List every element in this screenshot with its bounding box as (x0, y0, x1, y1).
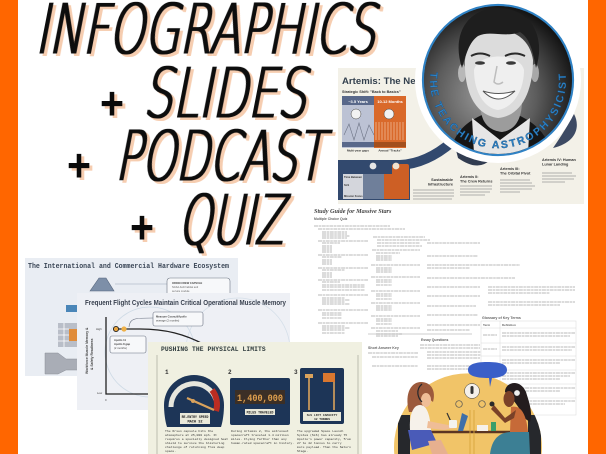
line chart: 0 (105, 398, 107, 402)
line chart (96, 317, 230, 402)
gauge (164, 375, 224, 427)
odometer: MILES TRAVELED (247, 410, 273, 414)
title line: slides: + (100, 77, 124, 129)
artemis iv mission (542, 114, 577, 182)
caption 3: The upgraded Space Launch (297, 429, 344, 433)
gauge: MACH 32 (187, 420, 203, 424)
caption 1 (165, 429, 228, 453)
callout: memory average: average (2 months) (156, 318, 179, 322)
number 2: 2 (228, 369, 232, 376)
glossary table: Term (483, 323, 490, 327)
title line: podcast (67, 118, 338, 199)
odometer: 1,400,000 (237, 394, 283, 405)
strategic shift subheading: Strategic Shift: "Back to Basics" (342, 90, 401, 94)
sustainable infrastructure: Infrastructure (428, 182, 454, 186)
short answer section: Short Answer Key (368, 346, 399, 350)
caption 1: requires a specially designed heat (165, 437, 228, 441)
glossary table (481, 316, 576, 415)
artemis iii mission (500, 167, 535, 192)
callout: crew capsule (167, 278, 230, 298)
artemis ii mission: The Crew Returns (460, 180, 492, 184)
gauge: RE-ENTRY SPEED (182, 415, 208, 419)
orbit track (400, 142, 452, 165)
laptop and table objects (458, 410, 496, 454)
title line: podcast: + (67, 139, 91, 191)
axis label line two: & Safety Readiness (90, 338, 94, 370)
comparison: years versus months (342, 96, 406, 152)
caption 1: The Orion capsule hits the (165, 429, 213, 433)
line chart: High (96, 327, 102, 331)
title line: quiz (130, 182, 298, 263)
title line: podcast: PODCAST (115, 120, 338, 199)
axis label: Workforce Muscle Memory & (85, 327, 89, 374)
caption 1: challenge of returning from deep (165, 445, 225, 449)
caption 3: Apollo's power capacity, from (297, 437, 351, 441)
chair left (398, 415, 410, 454)
comparison: years versus months: Multi-year gaps (347, 148, 369, 152)
short answer section (368, 334, 472, 366)
person right (490, 383, 531, 454)
caption 2: During Artemis 2, the astronaut (231, 429, 289, 433)
title line: quiz: + (133, 204, 157, 256)
left orange border (0, 0, 18, 454)
chair right (528, 415, 541, 454)
comparison table: SLS (344, 183, 349, 187)
title line: podcast: PODCAST (112, 118, 335, 197)
callout: crew capsule: service module (172, 289, 190, 293)
callout: apollo: Apollo 11 (114, 338, 126, 342)
callout: crew capsule: NASA-built habitat and (172, 285, 199, 289)
essay questions (420, 338, 500, 369)
comparison table: Mission Focus (344, 194, 363, 198)
lift capacity sliders (300, 368, 344, 424)
caption 3: more payload. Than the Saturn (297, 445, 351, 449)
panel: pushing the physical limits slide (148, 342, 362, 454)
artemis iii mission: The Orbital Pivot (500, 172, 531, 176)
caption 1: shield to survive the blistering (165, 441, 225, 445)
right orange border (588, 0, 606, 454)
artemis iii mission: Artemis III: (500, 167, 520, 171)
caption 1: space. (165, 449, 176, 453)
sustainable infrastructure: Sustainable (431, 177, 454, 182)
study guide title: Study Guide for Massive Stars (314, 208, 392, 215)
caption 3: 27 to 42 tonnes to carry (297, 441, 342, 445)
caption 3: System (SLS) has already 75 (297, 433, 347, 437)
portrait badge: the teaching astrophysicist (415, 4, 581, 163)
title line: quiz: + (130, 201, 154, 253)
odometer (230, 378, 290, 425)
lift capacity sliders: 42 TONNES (314, 418, 330, 421)
number 3: 3 (294, 369, 298, 376)
artemis ii mission (456, 150, 492, 195)
callout: memory average: Measure Council/Apollo (156, 314, 187, 318)
title: infographics + slides + podcast + quiz (32, 0, 390, 263)
badge text: THE TEACHING ASTROPHYSICIST (430, 72, 566, 148)
title line: quiz: QUIZ (178, 184, 298, 263)
panel: hardware ecosystem slide (25, 258, 238, 376)
number 1: 1 (165, 369, 169, 376)
callout: apollo: Apollo 8 gap (114, 342, 130, 346)
artemis heading: Artemis: The New Era (342, 76, 442, 87)
glossary table: Glossary of Key Terms (482, 316, 521, 320)
caption 1: atmosphere at 25,000 mph. It (165, 433, 217, 437)
quiz column three (427, 243, 520, 330)
essay questions: Essay Questions (421, 338, 448, 342)
comparison: years versus months: ~3.5 Years (348, 99, 369, 104)
quiz column two (371, 237, 430, 336)
caption 2 (231, 429, 294, 445)
slide heading: flight cycles: Frequent Flight Cycles Maintain Critical Operational Muscle Memory (85, 300, 286, 307)
callout: apollo: (2 months) (114, 346, 127, 350)
icon: speech bubble (468, 362, 507, 387)
table (427, 431, 512, 433)
caption 2: miles. Flying farther than any (231, 437, 287, 441)
caption 3: Stage. (297, 449, 308, 453)
comparison: years versus months: 10-12 Months (377, 99, 404, 104)
artemis iv mission: Lunar Landing (542, 162, 569, 166)
artemis iv mission: Artemis IV: Human (542, 158, 576, 162)
title line: slides: SLIDES (140, 55, 318, 134)
comparison table: Time Between (344, 175, 362, 179)
panel: artemis infographic (338, 68, 584, 204)
comparison: years versus months: Annual "Tracks" (378, 148, 402, 152)
title line: infographics (32, 0, 390, 72)
callout: crew capsule: ORION CREW CAPSULE (172, 281, 203, 285)
person left (407, 382, 457, 454)
callout: memory average (153, 312, 203, 326)
title line: podcast: + (70, 142, 94, 194)
sustainable infrastructure (413, 177, 454, 199)
callout: apollo (110, 336, 146, 353)
icon: crew capsule (90, 278, 114, 291)
icon: docking grid (58, 323, 78, 347)
title line: slides (100, 55, 321, 136)
panel: flight cycles slide (77, 293, 290, 410)
icon: microphone badge (464, 384, 480, 398)
quiz column one (314, 226, 405, 333)
caption 2: spacecraft traveled 1.4 million (231, 433, 289, 437)
caption 3 (297, 429, 351, 453)
podcast illustration (394, 362, 542, 454)
slide heading: hardware: The International and Commercial Hardware Ecosystem (28, 263, 230, 271)
panel: study guide document (314, 208, 576, 415)
slide heading: limits: PUSHING THE PHYSICAL LIMITS (161, 346, 266, 353)
comparison table (338, 160, 410, 200)
artemis ii mission: Artemis II: (460, 175, 479, 179)
study guide subheading: Multiple Choice Quiz (314, 217, 348, 221)
lift capacity sliders: SLS LIFT CAPACITY (307, 414, 338, 417)
icon: left reaction badge (456, 401, 462, 407)
essay prompts (488, 287, 575, 305)
caption 2: human-rated spacecraft in history. (231, 441, 294, 445)
photo: portrait (424, 6, 572, 154)
icon: rocket booster (45, 353, 78, 374)
icon: blue module (66, 305, 77, 312)
title line: slides: + (103, 80, 127, 132)
title line: slides: SLIDES (143, 57, 321, 136)
title line: quiz: QUIZ (175, 182, 295, 261)
glossary table: Definition (502, 323, 516, 327)
line chart: Low (97, 391, 103, 395)
icon: right reaction badge (479, 401, 485, 407)
